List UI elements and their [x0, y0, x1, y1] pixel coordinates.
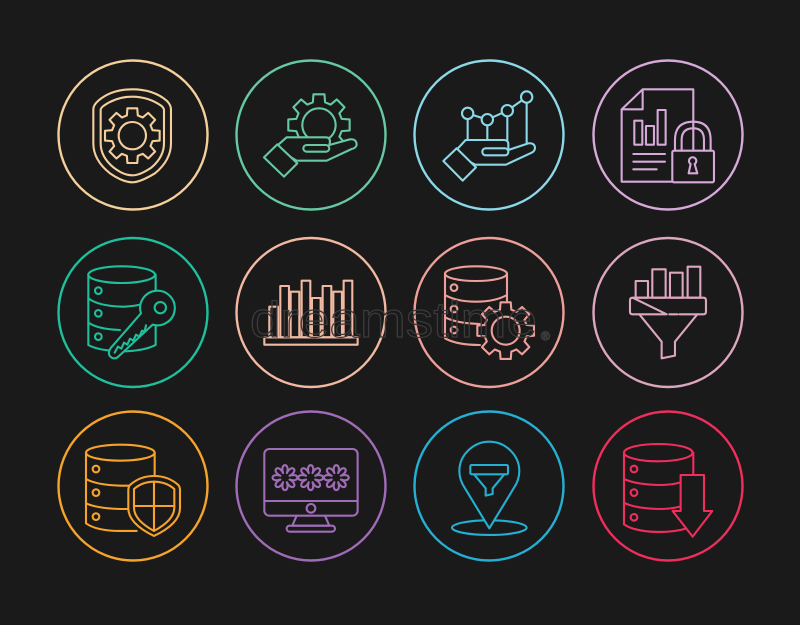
icon: document with lock	[622, 89, 714, 182]
icon: hand holding gear	[264, 94, 357, 177]
watermark: ®	[541, 329, 550, 343]
icon: database with download arrow	[624, 444, 712, 537]
panel: funnel with bars	[594, 238, 742, 387]
icon: location pin with funnel	[452, 442, 527, 535]
watermark: dreamstime	[250, 292, 537, 348]
icon: database with shield	[86, 445, 180, 536]
panel: monitor with password	[236, 412, 386, 560]
icon: bar chart	[264, 281, 358, 345]
panel: bar chart	[236, 238, 386, 387]
icon: monitor with password	[264, 449, 358, 532]
icon: funnel with bars	[630, 267, 706, 358]
panel: location pin with funnel	[414, 412, 564, 560]
panel: shield with gear	[58, 60, 208, 210]
icon: database with gear	[445, 266, 534, 359]
panel: database with download arrow	[594, 412, 742, 560]
panel: hand with line chart	[414, 60, 564, 210]
icon: database with key	[88, 266, 175, 358]
panel: hand holding gear	[236, 60, 386, 210]
panel: document with lock	[594, 60, 742, 210]
panel: database with shield	[58, 412, 208, 560]
panel: database with gear	[414, 238, 564, 387]
icon: hand with line chart	[443, 91, 535, 181]
icon: shield with gear	[93, 89, 171, 182]
panel: database with key	[58, 238, 208, 387]
